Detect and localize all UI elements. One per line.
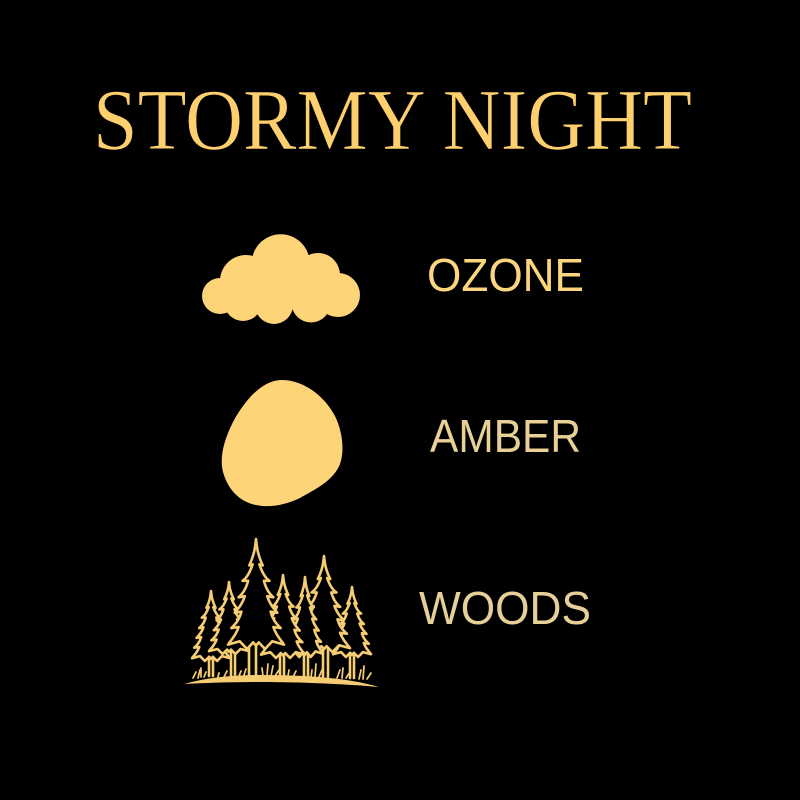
tree tall <box>333 587 371 657</box>
tree right tall <box>298 556 350 652</box>
ground <box>184 675 379 687</box>
tree tallest <box>228 539 284 649</box>
label: amber: AMBER <box>430 410 581 462</box>
icon: cloud <box>202 234 360 324</box>
tree far left <box>192 591 230 661</box>
icon: woods <box>184 539 379 687</box>
tree small right <box>287 577 323 657</box>
title: STORMY NIGHT <box>93 71 692 168</box>
trunks <box>209 643 354 678</box>
tree small centre <box>261 575 305 658</box>
icon: amber <box>222 380 342 506</box>
label: woods: WOODS <box>419 582 591 634</box>
tree second <box>209 582 249 654</box>
grass <box>193 664 371 679</box>
label: ozone: OZONE <box>427 249 584 301</box>
